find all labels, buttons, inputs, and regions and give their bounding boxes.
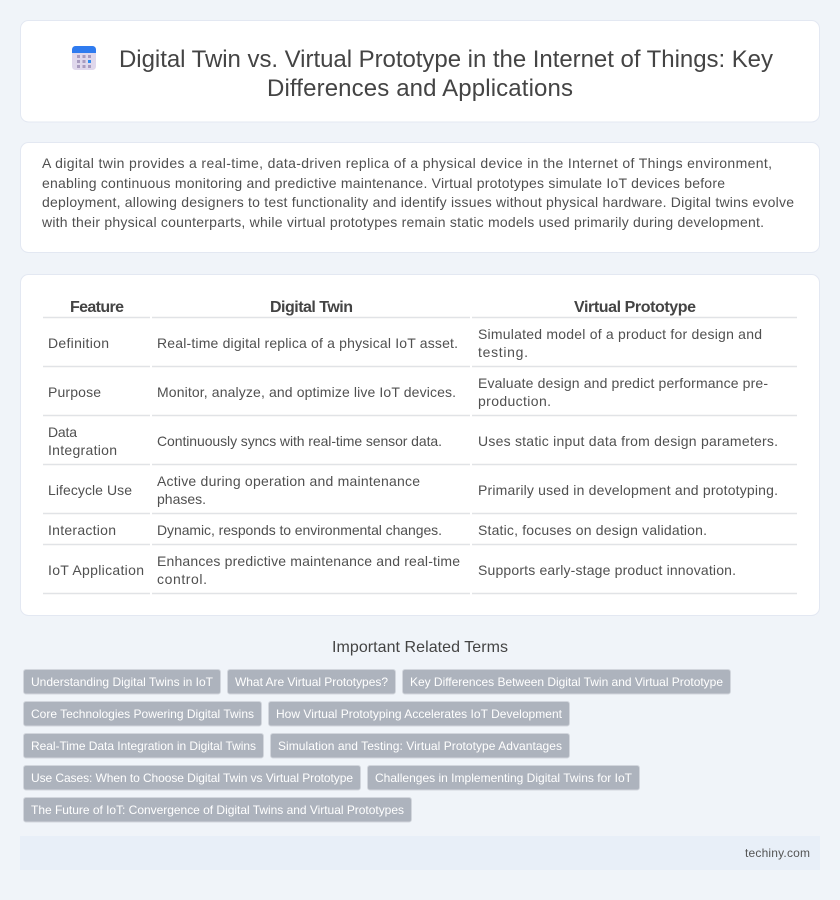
panel: title header (20, 20, 820, 122)
tag: The Future of IoT: Convergence of Digital Twins and Virtual Prototypes (31, 803, 404, 817)
tag: What Are Virtual Prototypes? (235, 675, 388, 689)
tag: Real-Time Data Integration in Digital Twins (31, 739, 256, 753)
title: Differences and Applications (267, 75, 573, 102)
tag (402, 670, 730, 694)
panel: comparison table (20, 274, 820, 616)
row: data integration: Integration (48, 442, 117, 458)
panel: introduction text (20, 142, 820, 252)
tag (24, 734, 264, 758)
table header: Feature (70, 299, 124, 316)
row: iot application (48, 553, 736, 587)
row: definition: testing. (478, 344, 528, 360)
row: purpose: Monitor, analyze, and optimize live IoT devices. (157, 384, 456, 400)
row: data integration (48, 424, 778, 458)
row: iot application: IoT Application (48, 562, 144, 578)
row: purpose: Purpose (48, 384, 101, 400)
row: purpose: Evaluate design and predict performance pre- (478, 375, 768, 391)
row: definition: Real-time digital replica of a physical IoT asset. (157, 335, 458, 351)
row: definition (48, 326, 762, 360)
row: lifecycle use: Active during operation and maintenance (157, 473, 420, 489)
tag: Simulation and Testing: Virtual Prototype Advantages (278, 739, 562, 753)
tag (24, 798, 412, 822)
row: iot application: Enhances predictive maintenance and real-time (157, 553, 460, 569)
tag (24, 702, 262, 726)
row: interaction (48, 522, 707, 538)
row: definition: Simulated model of a product for design and (478, 326, 762, 342)
related term tags (24, 670, 730, 822)
footer: techiny.com (745, 846, 810, 860)
row: purpose (48, 375, 768, 409)
row: data integration: Uses static input data from design parameters. (478, 433, 778, 449)
panel: introduction text: with their physical counterparts, while virtual prototypes remain static models used primarily during development. (41, 214, 764, 230)
row: lifecycle use: phases. (157, 491, 206, 507)
table header: Digital Twin (270, 299, 353, 316)
tag (270, 734, 570, 758)
tag: How Virtual Prototyping Accelerates IoT Development (276, 707, 563, 721)
row: data integration: Data (48, 424, 77, 440)
row: interaction: Static, focuses on design validation. (478, 522, 707, 538)
row: definition: Definition (48, 335, 109, 351)
tag: Use Cases: When to Choose Digital Twin vs Virtual Prototype (31, 771, 353, 785)
row: iot application: control. (157, 571, 207, 587)
tag: Core Technologies Powering Digital Twins (31, 707, 254, 721)
row: purpose: production. (478, 393, 551, 409)
tag: Challenges in Implementing Digital Twins for IoT (375, 771, 633, 785)
tag: Understanding Digital Twins in IoT (31, 675, 214, 689)
footer (20, 836, 820, 870)
table header: Virtual Prototype (574, 299, 696, 316)
tag (24, 670, 220, 694)
row: lifecycle use: Primarily used in development and prototyping. (478, 482, 778, 498)
row: lifecycle use (48, 473, 778, 507)
tag (268, 702, 570, 726)
table header (70, 299, 696, 316)
tag (228, 670, 396, 694)
tag: Key Differences Between Digital Twin and Virtual Prototype (410, 675, 723, 689)
panel: introduction text: A digital twin provides a real-time, data-driven replica of a physical device in the Internet of Things environment, (42, 155, 772, 171)
row: lifecycle use: Lifecycle Use (48, 482, 132, 498)
row: data integration: Continuously syncs with real-time sensor data. (157, 433, 442, 449)
tag (24, 766, 360, 790)
row: iot application: Supports early-stage product innovation. (478, 562, 736, 578)
panel: introduction text: deployment, allowing designers to test functionality and identify issues without physical hardware. Digital twins evolve (42, 194, 794, 210)
heading: related terms: Important Related Terms (332, 639, 508, 656)
title: Digital Twin vs. Virtual Prototype in the Internet of Things: Key (119, 46, 773, 73)
title (119, 46, 773, 102)
tag (368, 766, 640, 790)
row: interaction: Interaction (48, 522, 116, 538)
row: interaction: Dynamic, responds to environmental changes. (157, 522, 442, 538)
panel: introduction text: enabling continuous monitoring and predictive maintenance. Virtual prototypes simulate IoT devices before (42, 175, 725, 191)
icon: calendar (72, 46, 96, 70)
